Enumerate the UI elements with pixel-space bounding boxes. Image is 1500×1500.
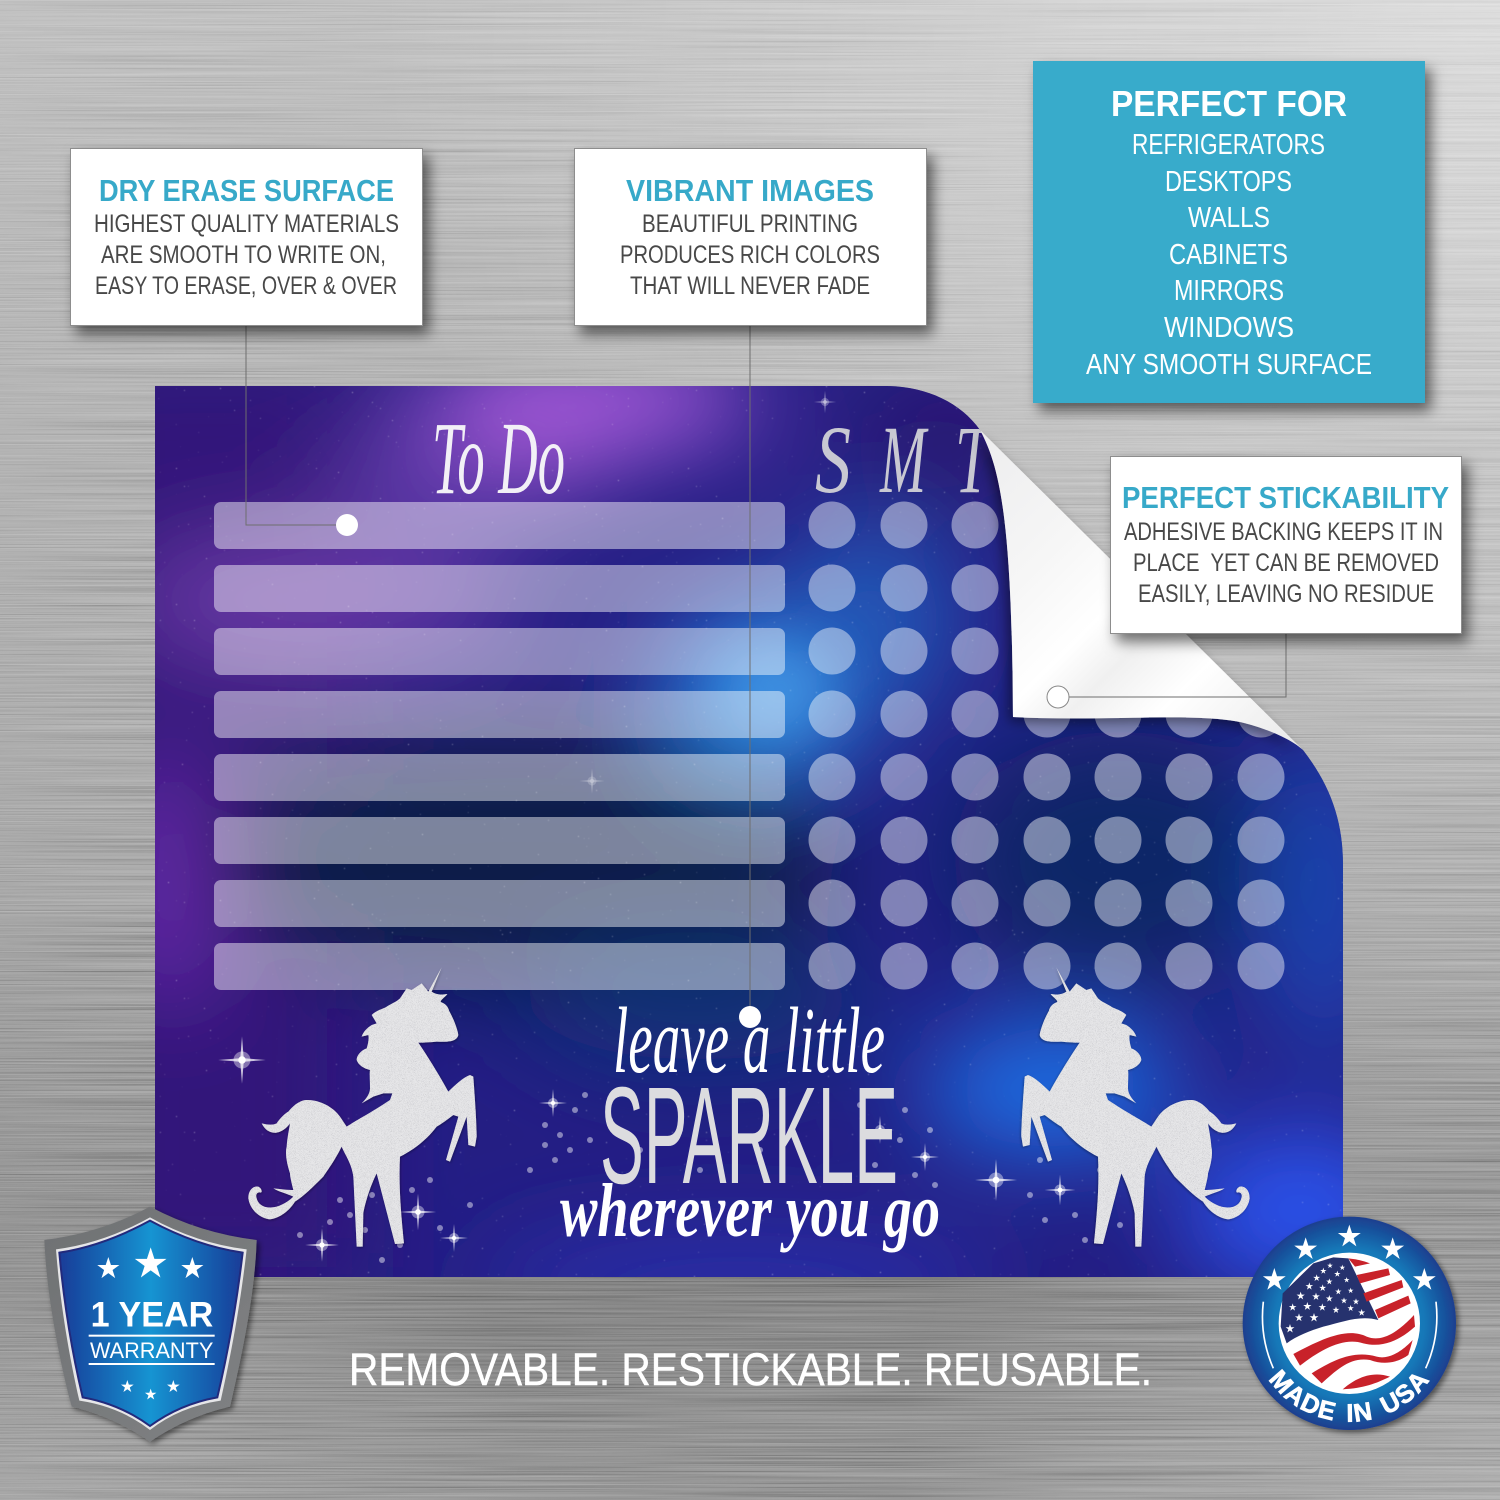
heading: To Do and weekday letters: To Do — [432, 401, 565, 516]
curved label: made in usa: MADE IN USA — [1268, 1368, 1430, 1422]
callout: vibrant images: BEAUTIFUL PRINTING — [642, 210, 858, 238]
icon: 1 year warranty shield — [44, 1207, 257, 1442]
quote: leave a little sparkle wherever you go: SPARKLE — [600, 1059, 898, 1213]
heading: To Do and weekday letters: T — [955, 406, 993, 513]
panel: galaxy dry erase sheet — [155, 386, 1343, 1277]
american flag — [1281, 1257, 1415, 1389]
callout: perfect stickability: PERFECT STICKABILITY — [1122, 480, 1449, 515]
panel: perfect for list: WALLS — [1188, 202, 1270, 234]
panel: perfect for list: REFRIGERATORS — [1132, 129, 1325, 161]
heading: To Do and weekday letters: S — [815, 406, 851, 513]
heading: To Do and weekday letters: M — [879, 406, 929, 513]
panel: perfect for list — [1033, 61, 1425, 403]
callout: dry erase surface — [70, 148, 422, 326]
galaxy background — [155, 386, 1343, 1277]
callout: dry erase surface: ARE SMOOTH TO WRITE ON, — [101, 241, 386, 269]
callout: dry erase surface: DRY ERASE SURFACE — [99, 173, 394, 208]
panel: perfect for list: ANY SMOOTH SURFACE — [1086, 349, 1372, 381]
tagline: REMOVABLE. RESTICKABLE. REUSABLE. — [349, 1344, 1152, 1395]
callout: vibrant images: THAT WILL NEVER FADE — [630, 272, 870, 300]
panel: perfect for list: MIRRORS — [1174, 275, 1284, 307]
callout: vibrant images: PRODUCES RICH COLORS — [620, 241, 880, 269]
quote: leave a little sparkle wherever you go: leave a little — [613, 989, 885, 1093]
quote: leave a little sparkle wherever you go: wherever you go — [560, 1169, 940, 1253]
callout: perfect stickability: EASILY, LEAVING NO RESIDUE — [1138, 580, 1434, 608]
callout: perfect stickability — [1110, 456, 1462, 634]
quote: leave a little sparkle wherever you go — [560, 989, 940, 1253]
icon: right glitter unicorn — [1021, 967, 1250, 1247]
callout: dry erase surface: EASY TO ERASE, OVER & OVER — [95, 272, 397, 300]
peeled white corner curl — [980, 430, 1303, 750]
panel: perfect for list: CABINETS — [1169, 239, 1288, 271]
callout: vibrant images — [574, 148, 926, 326]
callout: dry erase surface: HIGHEST QUALITY MATERIALS — [94, 210, 399, 238]
callout: perfect stickability: PLACE YET CAN BE REMOVED — [1133, 549, 1439, 577]
heading: To Do and weekday letters — [436, 424, 982, 494]
panel: perfect for list: WINDOWS — [1164, 312, 1294, 344]
weekly check circles — [808, 502, 1284, 990]
panel: perfect for list: DESKTOPS — [1165, 166, 1292, 198]
icon: 1 year warranty shield: WARRANTY — [90, 1338, 214, 1363]
callout leader lines and dots — [246, 325, 1286, 1028]
icon: left glitter unicorn — [248, 967, 477, 1247]
icon: 1 year warranty shield: 1 YEAR — [91, 1296, 213, 1335]
sparkle stars — [218, 391, 1123, 1263]
panel: perfect for list: PERFECT FOR — [1111, 83, 1347, 124]
icon: made in USA badge — [1242, 1216, 1462, 1436]
to-do writing rows — [214, 502, 785, 990]
callout: vibrant images: VIBRANT IMAGES — [626, 173, 874, 208]
